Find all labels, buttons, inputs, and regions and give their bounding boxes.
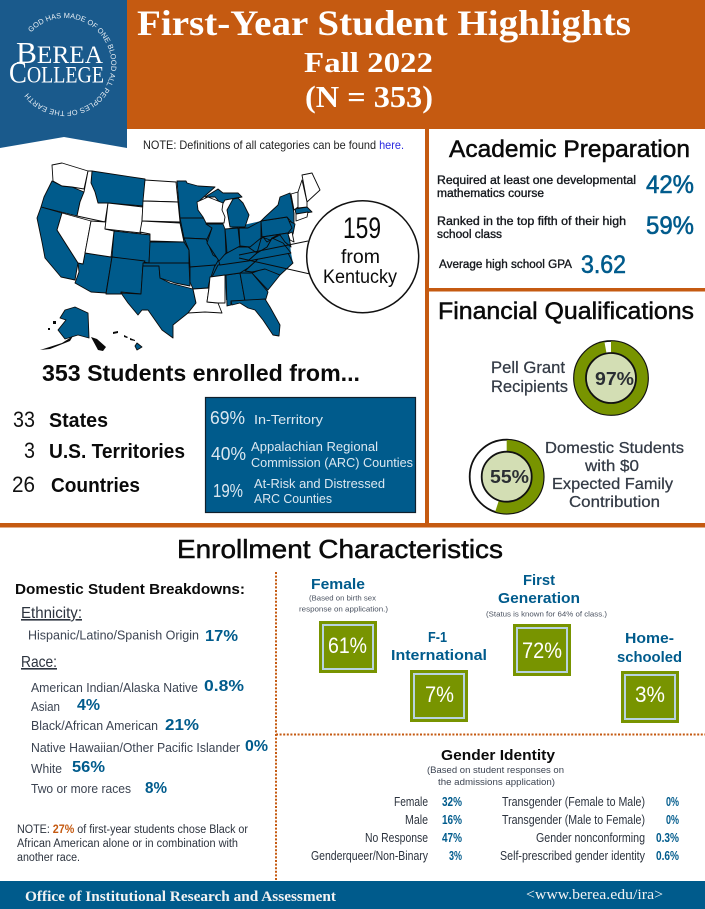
stat card: female: Female <box>311 576 365 593</box>
section dividers <box>0 129 705 528</box>
panel: domestic student breakdowns <box>15 581 268 864</box>
Kentucky: Kentucky <box>323 267 397 288</box>
math course stat: 42% <box>646 171 694 199</box>
heading: Domestic Student Breakdowns: <box>15 581 245 598</box>
top fifth stat: school class <box>437 229 502 241</box>
white states <box>52 163 320 313</box>
panel: territory shares: 19% <box>213 481 243 501</box>
stat card: female: response on application.) <box>299 605 389 614</box>
wordmark <box>9 35 104 90</box>
heading: Gender Identity <box>441 747 556 764</box>
origin counts: 26 <box>12 472 35 497</box>
Kentucky count: 159 <box>343 212 381 245</box>
race heading: Race: <box>21 654 57 671</box>
gender rows, right column: 0% <box>666 795 679 809</box>
stat card: female: 61% <box>328 633 367 658</box>
GPA stat: 3.62 <box>581 251 626 279</box>
stat card: first generation: 72% <box>522 638 562 663</box>
stat card: first generation: First <box>523 572 555 589</box>
gender rows, right column: Gender nonconforming <box>536 831 645 845</box>
Pell label: Recipients <box>491 377 568 396</box>
gender rows, left column: Genderqueer/Non-Binary <box>311 849 429 863</box>
race rows: American Indian/Alaska Native <box>31 680 198 695</box>
stat card: home-schooled: Home- <box>625 630 674 647</box>
heading: Academic Preparation <box>449 136 690 163</box>
heading: students enrolled: 353 Students enrolled from... <box>42 360 360 386</box>
donut: Pell 97%: 97% <box>595 368 634 389</box>
Hispanic row: Hispanic/Latino/Spanish Origin <box>28 628 199 642</box>
office name: Office of Institutional Research and Assessment <box>25 889 336 905</box>
race rows: White <box>31 761 62 776</box>
race rows: 21% <box>165 717 199 734</box>
gender rows, right column: Transgender (Female to Male) <box>502 795 645 809</box>
Berea College logo pennant <box>0 0 127 148</box>
gender rows, left column: 32% <box>442 795 462 809</box>
gender note: (Based on student responses on <box>427 765 564 776</box>
race rows: 0% <box>245 738 268 755</box>
callout pointer lines <box>239 241 310 274</box>
Pell label: Pell Grant <box>491 358 565 377</box>
subtitle: term: Fall 2022 <box>304 47 433 79</box>
race rows: Native Hawaiian/Other Pacific Islander <box>31 740 241 755</box>
footer <box>0 881 705 909</box>
stat card: F-1 international <box>391 629 487 722</box>
EFC label: Contribution <box>569 494 660 511</box>
math course stat <box>437 171 694 200</box>
stat card: home-schooled: schooled <box>617 649 682 666</box>
race rows: Black/African American <box>31 718 158 733</box>
panel: territory shares: 69% <box>210 408 245 428</box>
origin counts: Countries <box>51 475 140 497</box>
origin counts: 3 <box>24 438 35 463</box>
race note: NOTE: 27% of first-year students chose Black or <box>17 824 248 836</box>
gender rows, right column: Self-prescribed gender identity <box>500 849 646 863</box>
stat card: first generation: Generation <box>498 590 580 607</box>
stat card: F-1 international: International <box>391 647 487 664</box>
dotted section dividers <box>276 572 705 881</box>
seal motto: GOD HAS MADE OF ONE BLOOD ALL PEOPLES OF THE EARTH <box>24 12 116 116</box>
stat card: home-schooled <box>617 630 682 723</box>
gender rows, left column: Female <box>394 795 428 809</box>
EFC label <box>545 440 684 511</box>
gender rows, left column: Male <box>405 813 428 827</box>
race rows: 8% <box>145 780 167 797</box>
definitions note: NOTE: Definitions of all categories can be found here. <box>143 138 404 152</box>
gender rows, left column: 47% <box>442 831 462 845</box>
panel: gender identity <box>311 747 679 863</box>
race rows: Two or more races <box>31 781 131 796</box>
stat card: F-1 international: F-1 <box>428 629 447 646</box>
GPA stat: Average high school GPA <box>439 259 572 271</box>
stat card: home-schooled: 3% <box>635 682 665 707</box>
donut: EFC 55% <box>470 440 544 514</box>
panel: territory shares: ARC Counties <box>254 491 332 506</box>
panel: financial qualifications <box>438 298 694 514</box>
origin counts <box>12 407 185 497</box>
donut: Pell 97% <box>574 341 648 415</box>
race note: another race. <box>17 852 80 864</box>
wordmark: COLLEGE <box>9 54 104 90</box>
math course stat: Required at least one developmental <box>437 175 636 187</box>
gender rows, right column <box>500 795 679 863</box>
panel: territory shares: Commission (ARC) Counties <box>251 455 413 470</box>
gender rows, left column: No Response <box>365 831 428 845</box>
stat card: female <box>299 576 389 673</box>
gender rows, left column <box>311 795 462 863</box>
stat card: first generation: (Status is known for 64% of class.) <box>486 610 608 619</box>
panel: academic preparation <box>437 136 694 279</box>
stat card: female: (Based on birth sex <box>309 594 376 603</box>
EFC label: Expected Family <box>552 476 673 493</box>
EFC label: with $0 <box>584 458 639 475</box>
panel: territory shares: At-Risk and Distressed <box>254 476 385 491</box>
race note: African American alone or in combination with <box>17 838 238 850</box>
top fifth stat: 59% <box>646 212 694 240</box>
top fifth stat: Ranked in the top fifth of their high <box>437 216 626 228</box>
origin counts: 33 <box>13 407 35 432</box>
website: <www.berea.edu/ira> <box>526 887 663 903</box>
gender rows, right column: 0.6% <box>656 849 679 863</box>
gender rows, left column: 3% <box>449 849 462 863</box>
GPA stat <box>439 251 626 279</box>
title: First-Year Student Highlights <box>137 3 631 43</box>
callout: Kentucky students <box>307 201 419 313</box>
gender rows, right column: 0% <box>666 813 679 827</box>
heading: Financial Qualifications <box>438 298 694 325</box>
subtitle: sample size: (N = 353) <box>305 79 433 114</box>
blue states <box>37 171 312 350</box>
race rows: 4% <box>77 697 100 714</box>
panel: territory shares: Appalachian Regional <box>251 439 378 454</box>
math course stat: mathematics course <box>437 188 544 200</box>
race note <box>17 824 248 864</box>
wordmark: BEREA <box>16 35 103 70</box>
race rows <box>31 678 268 797</box>
gender rows, right column: Transgender (Male to Female) <box>502 813 645 827</box>
header banner <box>127 0 705 129</box>
Alaska and Hawaii islands <box>40 321 135 351</box>
panel: territory shares <box>206 398 416 512</box>
donut: EFC 55%: 55% <box>490 466 529 487</box>
stat card: first generation <box>486 572 608 676</box>
ethnicity heading: Ethnicity: <box>21 605 82 622</box>
stat card: F-1 international: 7% <box>425 682 454 707</box>
EFC label: Domestic Students <box>545 440 684 457</box>
gender note <box>427 765 564 788</box>
Hispanic row: 17% <box>205 628 238 645</box>
race rows: 56% <box>72 759 105 776</box>
origin counts: U.S. Territories <box>49 441 185 463</box>
gender note: the admissions application) <box>438 777 555 788</box>
race rows: Asian <box>31 699 60 714</box>
origin counts: States <box>49 410 108 432</box>
Pell label <box>491 358 568 396</box>
panel: territory shares: 40% <box>211 444 246 464</box>
US map of enrolled states <box>37 163 320 351</box>
race rows: 0.8% <box>204 678 244 695</box>
heading: enrollment characteristics: Enrollment Characteristics <box>177 534 503 564</box>
gender rows, left column: 16% <box>442 813 462 827</box>
gender rows, right column: 0.3% <box>656 831 679 845</box>
panel: territory shares: In-Territory <box>254 412 324 427</box>
from: from <box>341 247 380 268</box>
top fifth stat <box>437 212 694 241</box>
